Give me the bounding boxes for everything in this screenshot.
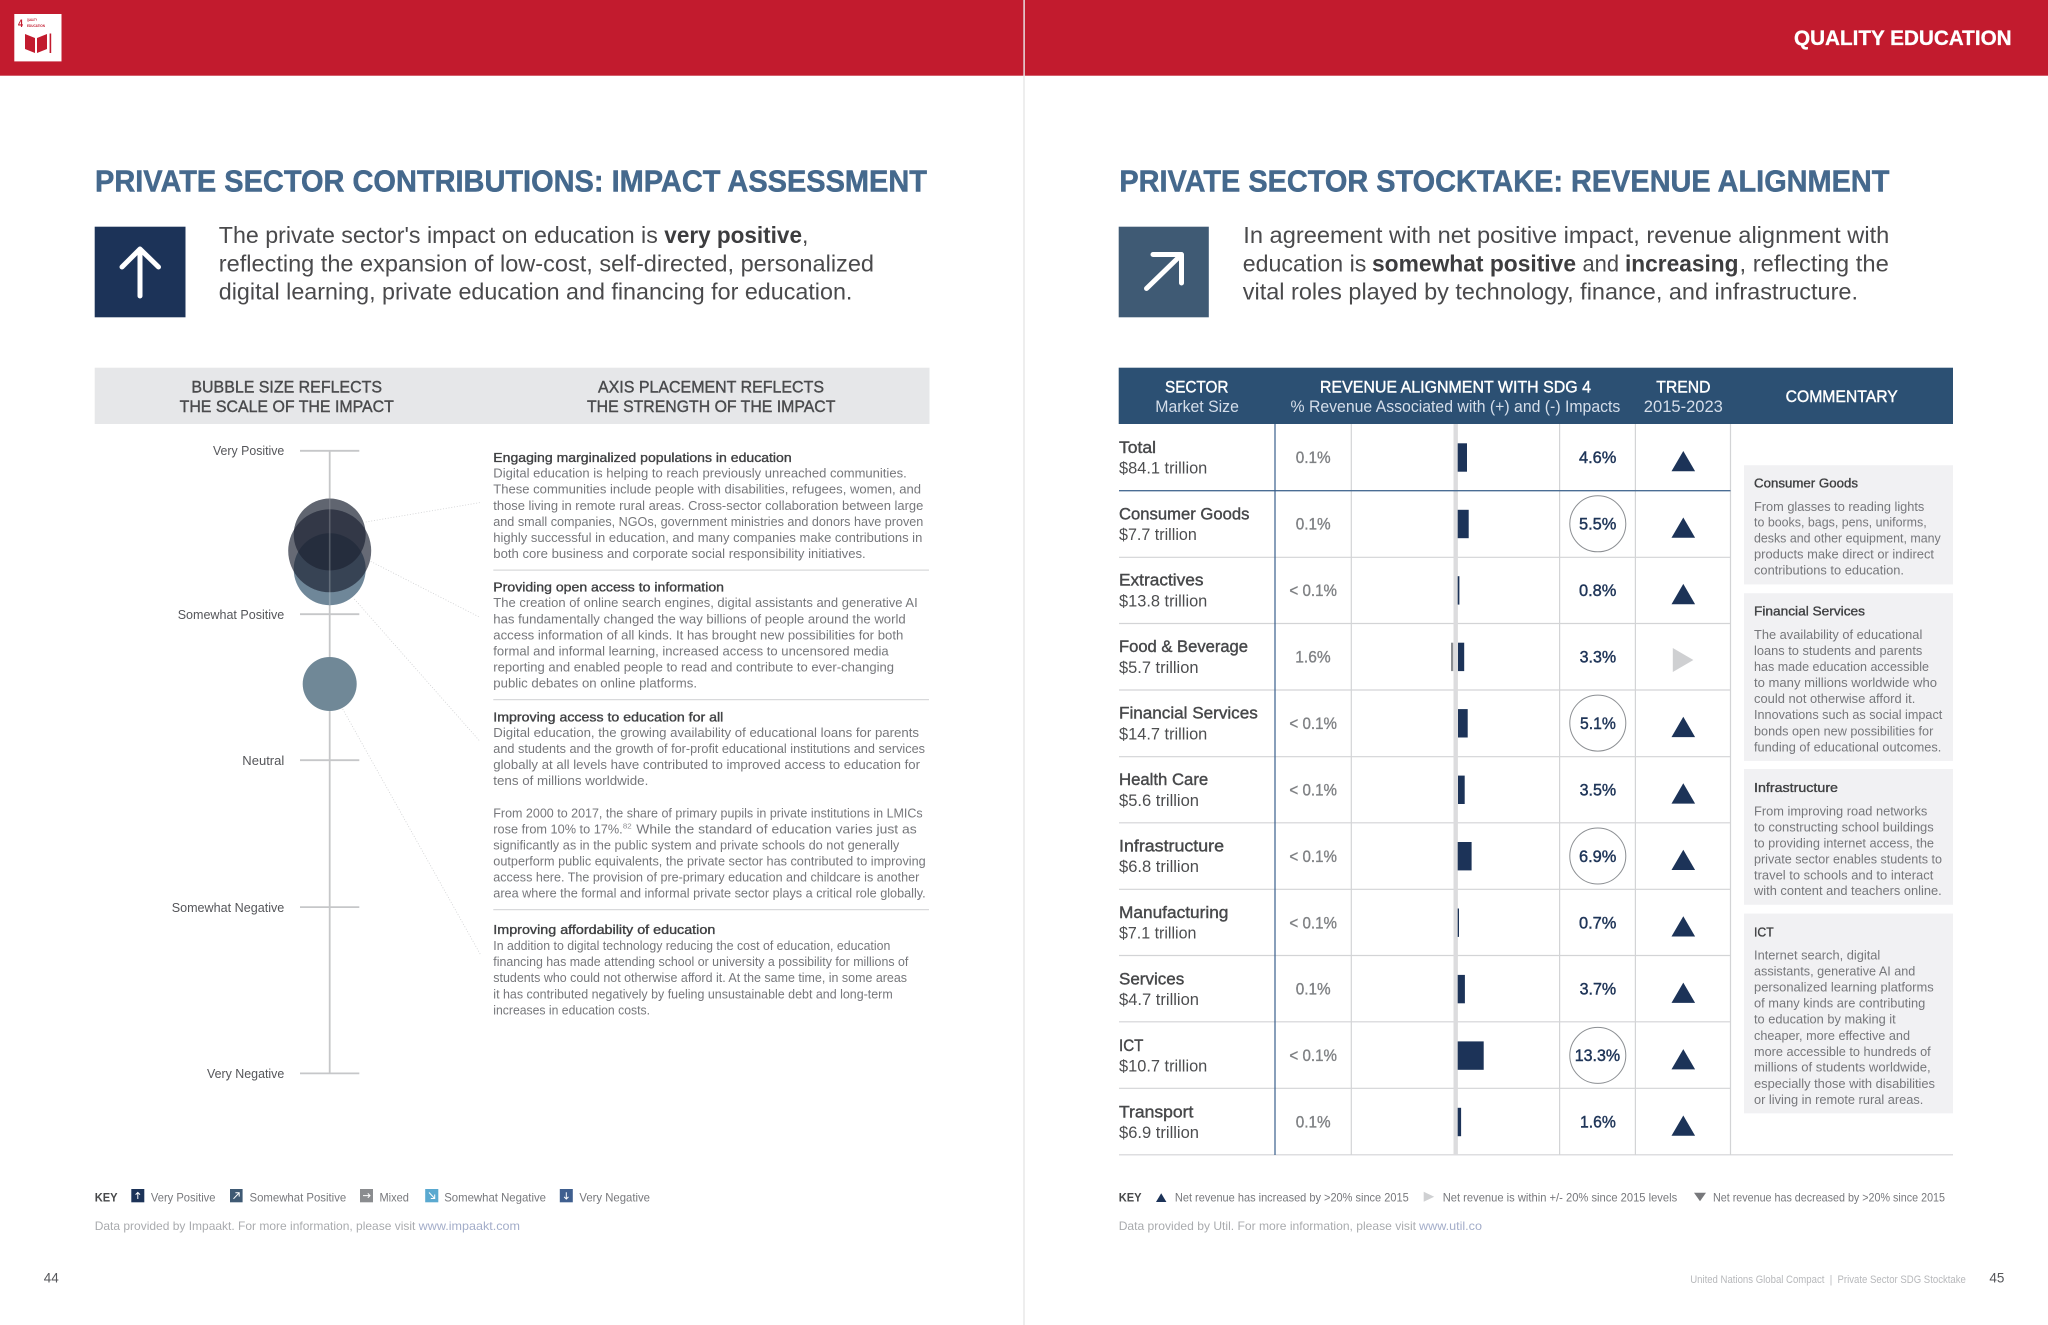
table row: health care: < 0.1% — [1289, 780, 1337, 799]
intro text: impact: , — [802, 222, 808, 248]
table row: infrastructure — [1119, 828, 1695, 884]
table row: manufacturing: 0.7% — [1579, 913, 1616, 932]
table row: financial services: $14.7 trillion — [1119, 724, 1207, 743]
table row: infrastructure: Infrastructure — [1119, 836, 1224, 856]
footer: report name: United Nations Global Compact | Private Sector SDG Stocktake — [1690, 1274, 1966, 1286]
axis labels: Very Negative — [207, 1066, 284, 1081]
table row: food and beverage: 1.6% — [1295, 648, 1331, 666]
table row: services: Services — [1119, 969, 1184, 988]
table row: manufacturing: Manufacturing — [1119, 903, 1228, 922]
commentary: consumer goods — [1744, 465, 1953, 584]
table header — [1119, 368, 1953, 424]
table row: extractives: 0.8% — [1579, 581, 1616, 600]
source note: impaakt: www.impaakt.com — [418, 1219, 520, 1233]
icon: very positive arrow — [95, 227, 186, 317]
icon: SDG 4 quality education logo: 4 — [18, 18, 24, 30]
table row: financial services: Financial Services — [1119, 704, 1258, 723]
text block: improving affordability: increases in education costs. — [493, 1002, 650, 1017]
commentary: infrastructure: with content and teachers online. — [1753, 883, 1942, 898]
text block: open access to information: The creation of online search engines, digital assistants and generative AI — [493, 595, 918, 610]
icon: SDG 4 quality education logo: QUALITY — [27, 18, 37, 22]
text block: open access to information: formal and informal learning, increased access to uncensored media — [493, 644, 890, 658]
text block: engaging marginalized populations: Digital education is helping to reach previously unreached communities. — [493, 466, 907, 480]
intro text: revenue: In agreement with net positive impact, revenue alignment with — [1243, 222, 1889, 248]
text block: engaging marginalized populations: These communities include people with disabilities, refugees, women, and — [493, 482, 921, 497]
source note: impaakt: Data provided by Impaakt. For more information, please visit — [95, 1219, 416, 1233]
table row: extractives: $13.8 trillion — [1119, 591, 1207, 610]
commentary: financial services: funding of educational outcomes. — [1754, 740, 1941, 755]
table row: food and beverage: Food & Beverage — [1119, 637, 1248, 656]
legend: impact key: Somewhat Positive — [250, 1190, 347, 1204]
text block: improving affordability — [493, 922, 909, 1017]
table row: infrastructure: 6.9% — [1579, 847, 1616, 866]
panel: bubble legend header: THE STRENGTH OF THE IMPACT — [587, 397, 835, 416]
icon: somewhat positive arrow — [1119, 227, 1209, 317]
table row: services: 0.1% — [1296, 980, 1331, 999]
key icon: very negative — [560, 1189, 573, 1202]
commentary: financial services: bonds open new possibilities for — [1754, 724, 1934, 739]
table row: transport: $6.9 trillion — [1119, 1123, 1199, 1142]
intro text: revenue: increasing — [1625, 250, 1738, 276]
panel: bubble legend header: THE SCALE OF THE IMPACT — [180, 397, 394, 416]
intro text: impact: very positive — [664, 222, 802, 248]
table row: ICT — [1119, 1027, 1695, 1083]
table grid — [1119, 424, 1953, 1155]
text block: improving access to education: and students and the growth of for-profit educational institutions and services — [493, 741, 925, 756]
intro text: impact — [219, 222, 874, 304]
intro text: revenue — [1243, 222, 1889, 304]
commentary: infrastructure: to constructing school buildings — [1754, 820, 1934, 835]
commentary: ICT: especially those with disabilities — [1754, 1076, 1935, 1091]
axis labels: Neutral — [242, 753, 284, 768]
commentary: ICT: personalized learning platforms — [1754, 980, 1934, 995]
commentary: consumer goods: Consumer Goods — [1754, 476, 1858, 490]
text block: engaging marginalized populations: highly successful in education, and many companies make contributions in — [493, 530, 922, 545]
intro text: revenue: somewhat positive — [1372, 250, 1576, 276]
commentary: ICT: or living in remote rural areas. — [1754, 1092, 1923, 1107]
intro text: revenue: education is — [1243, 250, 1366, 276]
text block: improving access to education: While the standard of education varies just as — [636, 821, 917, 836]
commentary: infrastructure — [1744, 769, 1953, 905]
text block: improving access to education: Digital education, the growing availability of educational loans for parents — [493, 725, 919, 740]
commentary: ICT: cheaper, more effective and — [1754, 1028, 1910, 1043]
source note: util: www.util.co — [1418, 1219, 1482, 1233]
text block: open access to information: Providing open access to information — [493, 580, 724, 594]
title: revenue alignment: PRIVATE SECTOR STOCKTAKE: REVENUE ALIGNMENT — [1119, 165, 1890, 199]
panel: bubble legend header: BUBBLE SIZE REFLECTS — [191, 377, 382, 396]
text block: engaging marginalized populations — [493, 450, 923, 561]
commentary: infrastructure: private sector enables students to — [1754, 852, 1942, 867]
icon: SDG 4 quality education logo — [14, 14, 62, 61]
table row: extractives — [1119, 571, 1695, 610]
commentary: ICT — [1744, 914, 1953, 1113]
text block: engaging marginalized populations: Engaging marginalized populations in education — [493, 450, 792, 465]
text block: improving access to education: From 2000 to 2017, the share of primary pupils in private institutions in LMICs — [493, 805, 923, 820]
text block: improving affordability: students who could not otherwise afford it. At the same time, in some areas — [493, 970, 907, 985]
axis labels: Very Positive — [213, 443, 284, 458]
table row: food and beverage: 3.3% — [1580, 648, 1616, 666]
commentary: financial services: has made education accessible — [1754, 659, 1929, 674]
text block: open access to information: reporting and enabled people to read and contribute to ever-changing — [493, 660, 894, 674]
table row: consumer goods: 0.1% — [1296, 515, 1331, 534]
commentary: infrastructure: From improving road networks — [1754, 804, 1927, 819]
header band — [0, 0, 2048, 76]
table row: consumer goods — [1119, 496, 1695, 552]
commentary: ICT: Internet search, digital — [1754, 948, 1880, 963]
commentary: financial services: Financial Services — [1754, 604, 1866, 618]
intro text: impact: The private sector's impact on education is — [219, 222, 658, 248]
table row: total: 0.1% — [1296, 448, 1331, 467]
table row: services: 3.7% — [1580, 980, 1616, 999]
text block: open access to information: public debates on online platforms. — [493, 676, 697, 691]
table row: food and beverage: $5.7 trillion — [1119, 658, 1198, 677]
text block: improving access to education: rose from 10% to 17%. — [493, 821, 623, 836]
legend: trend key: KEY — [1119, 1190, 1142, 1204]
text block: improving affordability: In addition to digital technology reducing the cost of education, education — [493, 938, 890, 953]
table header: % Revenue Associated with (+) and (-) Impacts — [1290, 397, 1620, 416]
table header: Market Size — [1155, 397, 1239, 416]
text block: improving access to education: access here. The provision of pre-primary education and childcare is another — [493, 870, 920, 885]
commentary: financial services: could not otherwise afford it. — [1754, 691, 1915, 706]
key icon: mixed — [360, 1189, 373, 1202]
table row: financial services — [1119, 695, 1695, 751]
table row: consumer goods: $7.7 trillion — [1119, 525, 1197, 544]
axis labels: Somewhat Positive — [178, 607, 284, 622]
table row: total — [1119, 438, 1695, 478]
table header: TREND — [1656, 377, 1710, 396]
legend: impact key: KEY — [95, 1190, 118, 1204]
text block: engaging marginalized populations: both core business and corporate social responsibility initiatives. — [493, 546, 866, 561]
bubble: education access — [303, 657, 357, 711]
table row: consumer goods: 5.5% — [1579, 515, 1616, 534]
table header: SECTOR — [1165, 377, 1228, 396]
chart: impact axis bubbles — [172, 443, 481, 1081]
table row: consumer goods: Consumer Goods — [1119, 504, 1249, 523]
panel: bubble legend header — [95, 368, 929, 424]
text block: improving access to education: 82 — [623, 822, 632, 830]
table header: REVENUE ALIGNMENT WITH SDG 4 — [1320, 377, 1591, 396]
commentary: ICT: of many kinds are contributing — [1754, 996, 1925, 1011]
table row: transport: 0.1% — [1296, 1113, 1331, 1132]
legend: impact key — [95, 1189, 650, 1204]
text block: improving access to education: globally at all levels have contributed to improved access to education for — [493, 757, 921, 772]
legend: impact key: Very Negative — [579, 1190, 650, 1204]
commentary: ICT: millions of students worldwide, — [1754, 1060, 1931, 1075]
title: impact assessment: PRIVATE SECTOR CONTRIBUTIONS: IMPACT ASSESSMENT — [95, 165, 927, 199]
axis labels: Somewhat Negative — [172, 900, 284, 915]
table row: manufacturing — [1119, 903, 1695, 943]
text block: open access to information: has fundamentally changed the way billions of people around the world — [493, 611, 906, 626]
table row: total: 4.6% — [1579, 448, 1616, 467]
legend: impact key: Mixed — [380, 1190, 409, 1204]
commentary: ICT: more accessible to hundreds of — [1754, 1044, 1931, 1059]
table row: financial services: < 0.1% — [1289, 714, 1337, 733]
key icon: very positive — [131, 1189, 144, 1202]
text block: improving affordability: financing has made attending school or university a possibility for millions of — [493, 954, 909, 969]
text block: open access to information — [493, 580, 918, 691]
table row: transport: 1.6% — [1580, 1113, 1616, 1132]
commentary: ICT: to education by making it — [1754, 1012, 1896, 1027]
table row: transport — [1119, 1102, 1695, 1142]
text block: improving access to education: outperform public equivalents, the private sector has contributed to improving — [493, 854, 926, 869]
legend: trend key: Net revenue has increased by >20% since 2015 — [1175, 1190, 1409, 1204]
intro text: impact: digital learning, private education and financing for education. — [219, 278, 852, 304]
table row: transport: Transport — [1119, 1102, 1194, 1121]
table row: infrastructure: $6.8 trillion — [1119, 857, 1199, 876]
key icon: somewhat negative — [425, 1189, 438, 1202]
table row: total: $84.1 trillion — [1119, 458, 1207, 478]
table header: COMMENTARY — [1786, 387, 1898, 406]
legend: trend key — [1119, 1190, 1945, 1204]
commentary: infrastructure: to providing internet access, the — [1754, 836, 1934, 851]
commentary: financial services: Innovations such as social impact — [1754, 707, 1943, 722]
table row: extractives: Extractives — [1119, 571, 1204, 590]
commentary: infrastructure: travel to schools and to interact — [1754, 868, 1934, 883]
table row: ICT: 13.3% — [1575, 1046, 1620, 1065]
table row: health care: 3.5% — [1580, 780, 1616, 799]
text block: improving access to education: significantly as in the public system and private schools do not generally — [493, 838, 900, 852]
commentary: consumer goods: products make direct or indirect — [1754, 547, 1934, 562]
table row: extractives: < 0.1% — [1289, 581, 1337, 600]
text block: improving affordability: it has contributed negatively by fueling unsustainable debt and long-term — [493, 986, 893, 1001]
commentary: infrastructure: Infrastructure — [1754, 780, 1838, 795]
table row: services — [1119, 969, 1695, 1009]
page number 44: 44 — [44, 1270, 59, 1286]
page number 45: 45 — [1989, 1270, 2005, 1286]
table row: ICT: ICT — [1119, 1036, 1143, 1055]
bubble cluster — [288, 498, 371, 605]
commentary: financial services: The availability of educational — [1754, 627, 1922, 642]
commentary: financial services: to many millions worldwide who — [1754, 675, 1937, 690]
commentary: consumer goods: desks and other equipment, many — [1754, 531, 1941, 546]
intro text: revenue: and — [1582, 250, 1619, 276]
legend: impact key: Very Positive — [151, 1190, 216, 1204]
commentary: consumer goods: From glasses to reading lights — [1754, 499, 1924, 514]
legend: impact key: Somewhat Negative — [444, 1190, 546, 1204]
panel: bubble legend header: AXIS PLACEMENT REFLECTS — [598, 377, 824, 396]
table row: ICT: < 0.1% — [1289, 1046, 1337, 1065]
table row: manufacturing: $7.1 trillion — [1119, 924, 1196, 943]
text block: improving access to education: area where the formal and informal private sector plays a critical role globally. — [493, 886, 926, 901]
commentary: consumer goods: contributions to education. — [1754, 563, 1904, 578]
table row: infrastructure: < 0.1% — [1289, 847, 1337, 866]
table row: manufacturing: < 0.1% — [1289, 913, 1337, 932]
table row: health care: Health Care — [1119, 770, 1208, 789]
table row: financial services: 5.1% — [1580, 714, 1616, 733]
table header: 2015-2023 — [1644, 397, 1723, 416]
legend: trend key: Net revenue has decreased by >20% since 2015 — [1713, 1190, 1945, 1204]
text block: engaging marginalized populations: and small companies, NGOs, government ministries and donors have proven — [493, 514, 923, 529]
text block: improving access to education: Improving access to education for all — [493, 709, 723, 724]
table row: food and beverage — [1119, 637, 1693, 677]
commentary: consumer goods: to books, bags, pens, uniforms, — [1754, 515, 1927, 530]
commentary: financial services: loans to students and parents — [1754, 643, 1922, 658]
commentary: ICT: assistants, generative AI and — [1754, 963, 1915, 978]
text block: improving access to education — [493, 709, 926, 901]
legend: trend key: Net revenue is within +/- 20% since 2015 levels — [1443, 1190, 1677, 1204]
text block: improving affordability: Improving affordability of education — [493, 922, 715, 937]
table row: total: Total — [1119, 438, 1156, 457]
commentary: ICT: ICT — [1754, 924, 1774, 939]
table row: ICT: $10.7 trillion — [1119, 1057, 1207, 1076]
text block: engaging marginalized populations: those living in remote rural areas. Cross-sector collaboration between large — [493, 498, 923, 513]
source note: util: Data provided by Util. For more information, please visit — [1119, 1219, 1417, 1233]
text block: open access to information: access information of all kinds. It has brought new possibilities for both — [493, 627, 903, 642]
table row: services: $4.7 trillion — [1119, 990, 1199, 1009]
header label: quality education: QUALITY EDUCATION — [1794, 26, 2012, 50]
text block: improving access to education: tens of millions worldwide. — [493, 773, 648, 788]
icon: SDG 4 quality education logo: EDUCATION — [27, 24, 45, 28]
intro text: impact: reflecting the expansion of low-cost, self-directed, personalized — [219, 250, 874, 276]
key icon: somewhat positive — [230, 1189, 243, 1202]
leader lines — [343, 503, 481, 955]
axis labels — [172, 443, 284, 1081]
intro text: revenue: , reflecting the — [1740, 250, 1889, 276]
commentary: financial services — [1744, 593, 1953, 761]
intro text: revenue: vital roles played by technology, finance, and infrastructure. — [1243, 278, 1858, 304]
table row: health care: $5.6 trillion — [1119, 791, 1199, 810]
table row: health care — [1119, 770, 1695, 810]
